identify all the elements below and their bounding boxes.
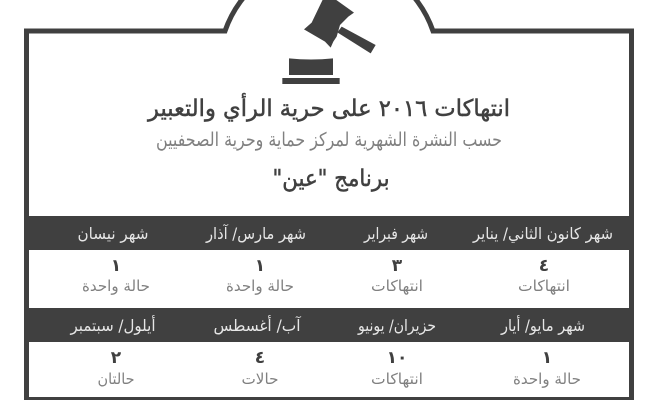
header band: first row: شهر نيسان (78, 224, 148, 244)
values: first row: ١ (111, 256, 121, 276)
values: second row: انتهاكات (371, 370, 423, 388)
values: second row: حالتان (98, 370, 134, 388)
program name: برنامج "عين" (272, 166, 390, 192)
header band: second row (29, 308, 630, 342)
values: second row: حالة واحدة (513, 370, 581, 388)
values: first row: ١ (255, 256, 265, 276)
header band: first row: شهر كانون الثاني/ يناير (472, 224, 613, 244)
values: second row: حالات (242, 370, 278, 388)
title: انتهاكات ٢٠١٦ على حرية الرأي والتعبير (147, 93, 510, 122)
values: second row: ١٠ (387, 348, 407, 368)
subtitle: حسب النشرة الشهرية لمركز حماية وحرية الصحفيين (156, 129, 502, 151)
values: second row: ٤ (255, 348, 265, 368)
values: second row: ١ (542, 348, 552, 368)
header band: first row: شهر مارس/ آذار (205, 224, 306, 244)
values: first row: حالة واحدة (82, 277, 150, 295)
header band: second row: أيلول/ سبتمبر (70, 315, 156, 336)
values: first row: انتهاكات (371, 277, 423, 295)
header band: second row: آب/ أغسطس (214, 315, 302, 336)
header band: first row: شهر فبراير (363, 224, 428, 244)
values: first row: انتهاكات (518, 277, 570, 295)
header band: second row: شهر مايو/ أيار (500, 315, 585, 336)
values: first row: حالة واحدة (226, 277, 294, 295)
values: first row: ٤ (539, 256, 549, 276)
header band: first row (29, 216, 630, 250)
values: second row: ٢ (111, 348, 122, 368)
values: first row: ٣ (392, 256, 403, 276)
icon: gavel (282, 0, 376, 84)
values: first row (82, 256, 570, 295)
bottom border (24, 397, 634, 400)
header band: second row: حزيران/ يونيو (357, 316, 436, 336)
values: second row (98, 348, 581, 388)
